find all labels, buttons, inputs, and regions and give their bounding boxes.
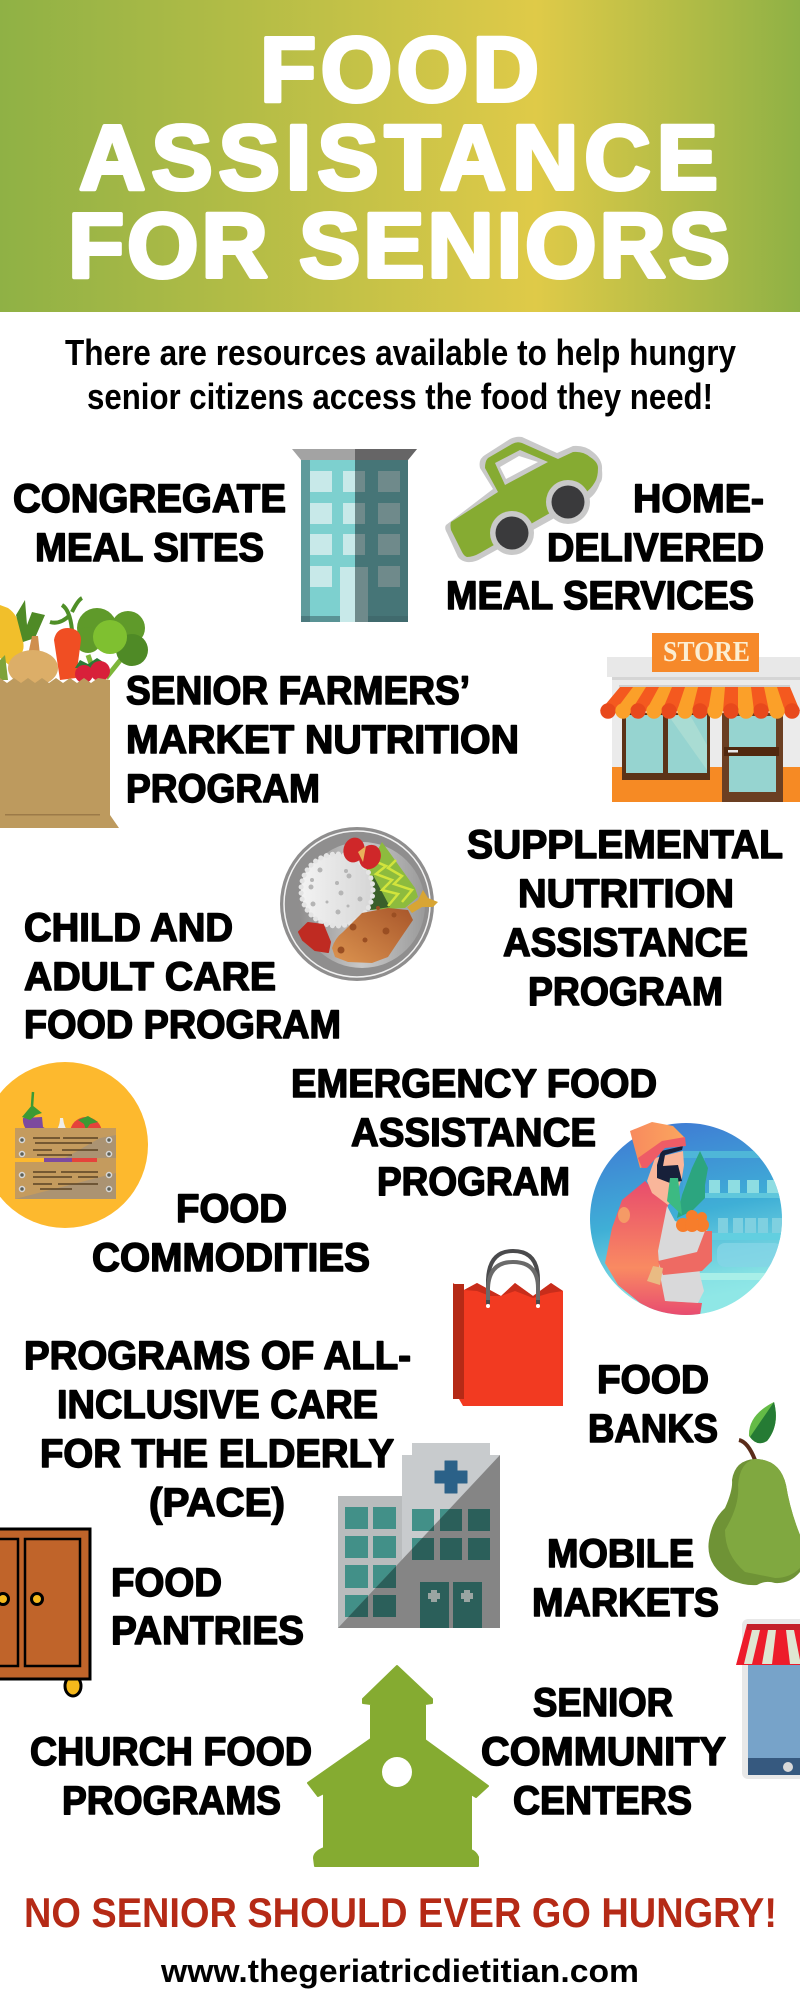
title: ASSISTANCE <box>79 107 718 209</box>
label: senior farmers market nutrition program: PROGRAM <box>126 767 320 811</box>
label: supplemental nutrition assistance program: ASSISTANCE <box>503 921 748 965</box>
icon: red shopping bag <box>453 1251 563 1406</box>
label: senior community centers: COMMUNITY <box>481 1730 726 1774</box>
label: church food programs: CHURCH FOOD <box>30 1730 312 1774</box>
label: mobile markets <box>532 1532 719 1625</box>
label: church food programs: PROGRAMS <box>62 1779 281 1823</box>
label: congregate meal sites: CONGREGATE <box>13 477 286 521</box>
icon: green pickup car <box>445 437 602 562</box>
label: home-delivered meal services: DELIVERED <box>547 526 764 570</box>
label: emergency food assistance program: ASSISTANCE <box>351 1111 596 1155</box>
label: food commodities <box>92 1187 370 1280</box>
label: senior farmers market nutrition program: MARKET NUTRITION <box>126 718 519 762</box>
label: supplemental nutrition assistance program <box>467 823 783 1014</box>
label: congregate meal sites: MEAL SITES <box>35 526 264 570</box>
label: home-delivered meal services: MEAL SERVICES <box>446 574 754 618</box>
label: programs of all-inclusive care: FOR THE ELDERLY <box>40 1432 394 1476</box>
label: emergency food assistance program: EMERGENCY FOOD <box>291 1062 657 1106</box>
label: emergency food assistance program <box>291 1062 657 1204</box>
label: senior farmers market nutrition program: SENIOR FARMERS’ <box>126 669 470 713</box>
title: FOOD <box>260 19 539 121</box>
label: congregate meal sites <box>13 477 286 570</box>
label: senior community centers <box>481 1681 726 1823</box>
label: food pantries <box>111 1561 304 1653</box>
icon: apartment building <box>292 449 417 622</box>
label: programs of all-inclusive care: (PACE) <box>149 1481 285 1525</box>
icon: cupboard <box>0 1529 90 1696</box>
label: food pantries: PANTRIES <box>111 1609 304 1653</box>
icon: mobile store phone <box>736 1619 800 1779</box>
label: church food programs <box>30 1730 312 1823</box>
label: child and adult care food program <box>24 906 341 1047</box>
label: food banks: BANKS <box>588 1407 718 1451</box>
title: FOR SENIORS <box>68 195 730 297</box>
icon: store front <box>600 633 800 802</box>
icon: store front: STORE <box>663 637 750 668</box>
label: child and adult care food program: CHILD AND <box>24 906 233 950</box>
label: senior community centers: CENTERS <box>513 1779 692 1823</box>
label: food commodities: COMMODITIES <box>92 1236 370 1280</box>
intro text: senior citizens access the food they need! <box>87 376 713 417</box>
label: food banks: FOOD <box>597 1358 709 1402</box>
label: programs of all-inclusive care: PROGRAMS OF ALL- <box>24 1334 411 1378</box>
label: supplemental nutrition assistance program: PROGRAM <box>528 970 723 1014</box>
label: supplemental nutrition assistance program: SUPPLEMENTAL <box>467 823 783 867</box>
label: food banks <box>588 1358 718 1451</box>
icon: grocery bag with vegetables <box>0 598 148 828</box>
label: emergency food assistance program: PROGRAM <box>377 1160 570 1204</box>
icon: church <box>308 1666 488 1866</box>
label: food pantries: FOOD <box>111 1561 222 1605</box>
icon: pear <box>708 1402 800 1585</box>
label: child and adult care food program: FOOD PROGRAM <box>24 1003 341 1047</box>
header banner <box>0 0 800 312</box>
label: senior farmers market nutrition program <box>126 669 519 811</box>
label: home-delivered meal services: HOME- <box>633 477 764 521</box>
label: supplemental nutrition assistance program: NUTRITION <box>518 872 734 916</box>
intro text <box>65 332 736 417</box>
website url: www.thegeriatricdietitian.com <box>160 1953 639 1989</box>
label: food commodities: FOOD <box>176 1187 287 1231</box>
icon: shopper in supermarket <box>590 1122 783 1320</box>
icon: hospital <box>338 1443 500 1628</box>
label: mobile markets: MOBILE <box>547 1532 694 1576</box>
label: programs of all-inclusive care <box>24 1334 411 1525</box>
label: child and adult care food program: ADULT CARE <box>24 955 276 999</box>
title <box>68 19 730 297</box>
label: senior community centers: SENIOR <box>533 1681 673 1725</box>
label: programs of all-inclusive care: INCLUSIVE CARE <box>57 1383 378 1427</box>
icon: plate of food <box>280 827 438 981</box>
label: mobile markets: MARKETS <box>532 1581 719 1625</box>
icon: vegetable crate <box>0 1062 148 1228</box>
label: home-delivered meal services <box>446 477 764 618</box>
